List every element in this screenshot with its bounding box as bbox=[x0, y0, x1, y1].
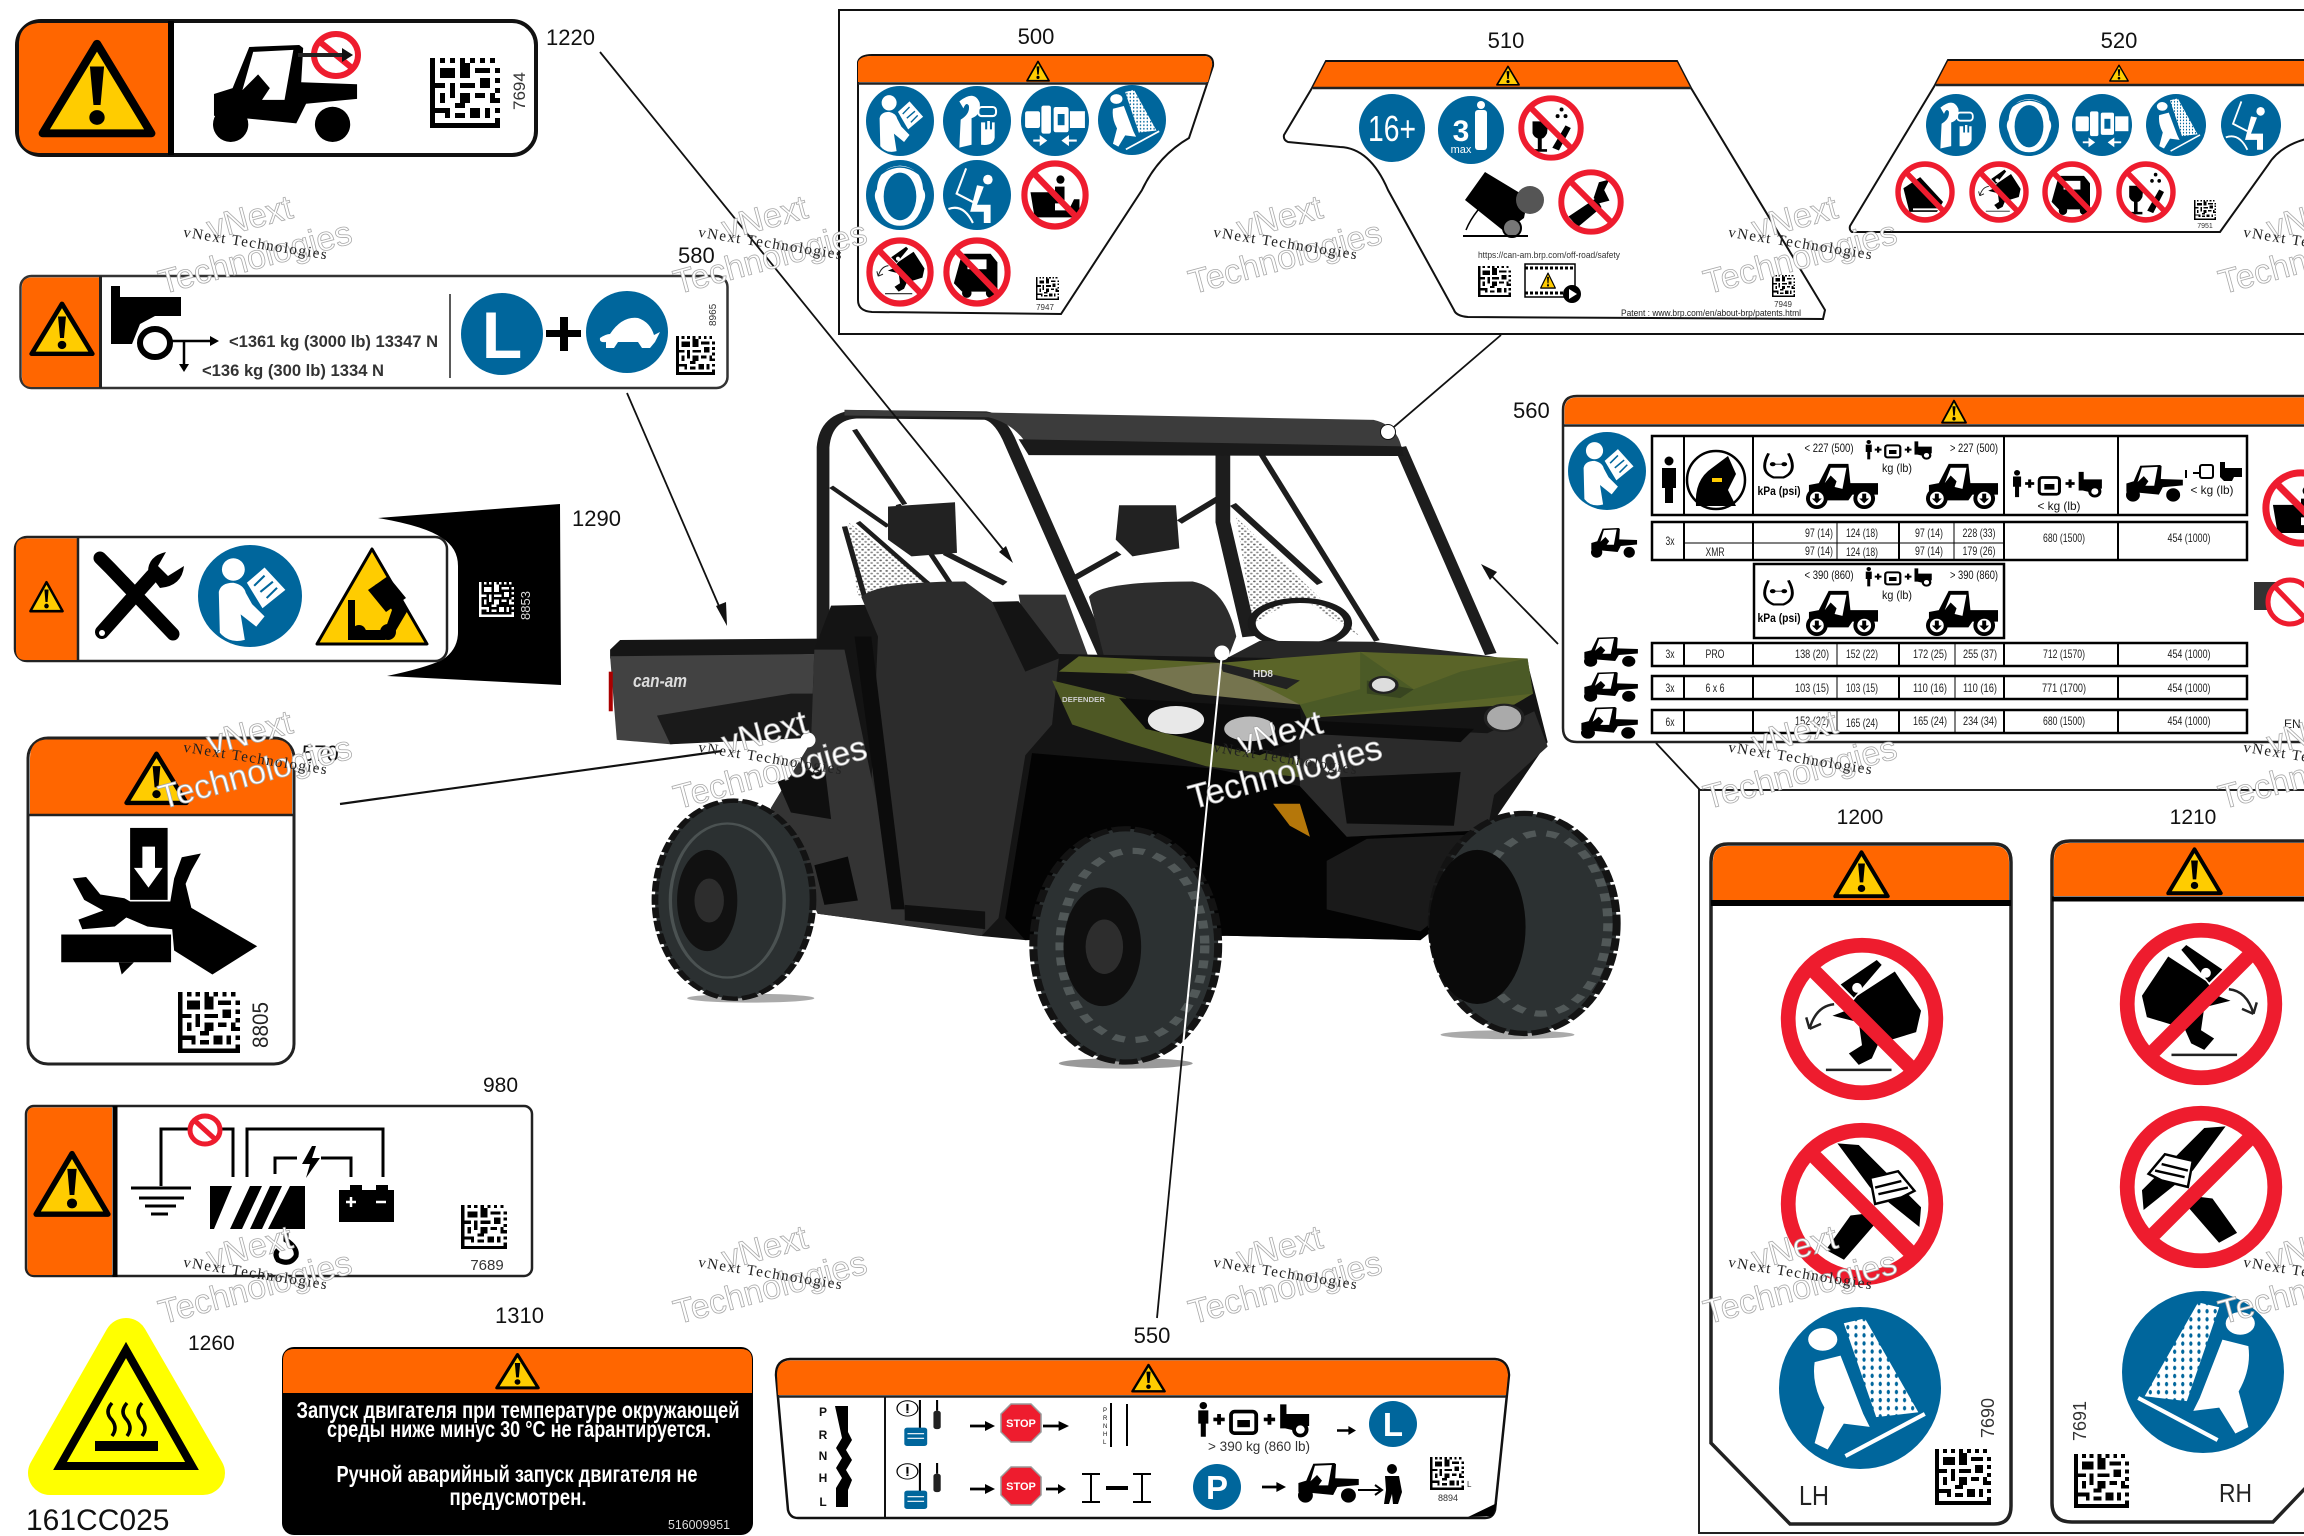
label: 1290: 1290 bbox=[572, 506, 621, 531]
watermark tiles: vNext Technologies bbox=[697, 225, 843, 263]
small gear diagram: R bbox=[1103, 1416, 1108, 1422]
row: PRO: 712 (1570) bbox=[2043, 647, 2085, 661]
row: base and XMR: 97 (14) bbox=[1805, 544, 1833, 558]
icon: tilted vehicle bbox=[1463, 172, 1544, 237]
label: 1260: 1260 bbox=[188, 1332, 235, 1355]
row: 6x6: 6 x 6 bbox=[1706, 681, 1725, 695]
watermark tiles bbox=[154, 188, 2304, 1332]
watermark tiles: vNext Technologies bbox=[1727, 740, 1873, 778]
panel: label 980 bbox=[26, 1106, 532, 1277]
row: 6x: 6x bbox=[1666, 715, 1674, 729]
leader: 560 to 1200 frame bbox=[1656, 743, 1700, 790]
header icons: < kg (lb) bbox=[2190, 483, 2234, 497]
row: PRO: 152 (22) bbox=[1846, 647, 1878, 661]
row 2 sequence: STOP bbox=[1006, 1481, 1036, 1493]
watermark tiles: vNext Technologies bbox=[1212, 225, 1358, 263]
watermark tiles: vNext Technologies bbox=[1727, 1255, 1873, 1293]
watermark tiles: Technologies bbox=[154, 214, 356, 302]
icon: no entry bbox=[298, 34, 358, 76]
panel: label 550 bbox=[776, 1359, 1509, 1518]
panel: label group 500 510 520 frame bbox=[839, 10, 2304, 334]
small gear diagram: P bbox=[1103, 1408, 1107, 1414]
leader: 550 bbox=[1157, 646, 1230, 1318]
second pressure header: kPa (psi) bbox=[1758, 611, 1801, 625]
small gear diagram: N bbox=[1103, 1424, 1107, 1430]
header icons bbox=[1662, 440, 2242, 513]
label: 570: 570 bbox=[302, 741, 339, 766]
second pressure header: < 390 (860) bbox=[1804, 568, 1854, 582]
wind nets bbox=[848, 522, 938, 597]
watermark tiles: Technologies bbox=[1699, 729, 1901, 817]
url text: https://can-am.brp.com/off-road/safety bbox=[1478, 250, 1620, 260]
row: base and XMR: 124 (18) bbox=[1846, 526, 1878, 540]
watermark tiles: Technologies bbox=[154, 729, 356, 817]
watermark tiles: vNext bbox=[1233, 703, 1327, 763]
row: 6x6: 771 (1700) bbox=[2042, 681, 2086, 695]
icon: hook bbox=[276, 1232, 296, 1262]
panel: label 560 bbox=[1563, 396, 2304, 742]
leader: 580 arrow bbox=[627, 393, 727, 626]
watermark tiles: vNext bbox=[718, 188, 812, 248]
panel: label 1290: 8853 bbox=[518, 591, 533, 620]
warning text in russian: среды ниже минус 30 °C не гарантируется. bbox=[327, 1416, 711, 1442]
decal 1200: 7690 bbox=[1978, 1398, 1998, 1438]
icon: video bbox=[1525, 264, 1581, 303]
label: 1220: 1220 bbox=[546, 25, 595, 50]
roof bbox=[844, 410, 1402, 448]
tongue weight text: <136 kg (300 lb) 1334 N bbox=[202, 361, 384, 380]
icon: winch bbox=[210, 1186, 305, 1229]
row: 6x: 454 (1000) bbox=[2168, 714, 2210, 728]
row: base and XMR: 3x bbox=[1666, 534, 1674, 548]
decal 510 bbox=[1284, 61, 1825, 319]
icon: L circle: L bbox=[482, 298, 522, 372]
icon: turtle circle bbox=[586, 291, 668, 373]
second pressure header: kg (lb) bbox=[1882, 588, 1912, 602]
watermark tiles: vNext Technologies bbox=[1212, 740, 1358, 778]
row: base and XMR: 680 (1500) bbox=[2043, 531, 2085, 545]
icon: person exit bbox=[1358, 1464, 1402, 1504]
row: base and XMR: XMR bbox=[1706, 545, 1725, 559]
leader: 570 bbox=[340, 732, 816, 804]
cargo bed bbox=[610, 639, 824, 658]
decal 1210 bbox=[2052, 841, 2304, 1522]
gear selector letters: N bbox=[819, 1449, 827, 1463]
row: 6x6 bbox=[1652, 676, 2247, 699]
leader: 510 to roof bbox=[1388, 335, 1501, 432]
wiring diagram bbox=[131, 1129, 383, 1214]
icon: 16+: 16+ bbox=[1368, 108, 1416, 149]
label: 510: 510 bbox=[1488, 28, 1524, 53]
header icons: < kg (lb) bbox=[2038, 499, 2080, 513]
panel: label 580: 8965 bbox=[708, 303, 719, 326]
panel: label 1220 bbox=[17, 21, 536, 155]
leader: 1220 arrow bbox=[600, 52, 1013, 563]
icon: 3 max bbox=[1438, 96, 1504, 164]
vehicle illustration: HD8 bbox=[1253, 669, 1273, 680]
row: PRO: 138 (20) bbox=[1795, 647, 1829, 661]
row: 6x6: 110 (16) bbox=[1913, 681, 1947, 695]
watermark tiles: vNext bbox=[1748, 703, 1842, 763]
gear selector letters: P bbox=[819, 1405, 827, 1419]
gate bar bbox=[835, 1406, 852, 1507]
small gear diagram: L bbox=[1103, 1440, 1107, 1446]
watermark tiles: vNext bbox=[203, 1218, 297, 1278]
icon: 3 max: 3 bbox=[1453, 115, 1469, 148]
decal 510: Patent : www.brp.com/en/about-brp/patents.html bbox=[1621, 308, 1801, 318]
row: base and XMR: 97 (14) bbox=[1915, 544, 1943, 558]
icon: L circle bbox=[461, 293, 543, 375]
decal 520: 7951 bbox=[2197, 223, 2213, 230]
icon: hot surface warning 1260 bbox=[50, 1340, 203, 1473]
green hood bbox=[1059, 652, 1533, 718]
row: 6x: 165 (24) bbox=[1913, 714, 1947, 728]
leader: 560 arrow bbox=[1481, 564, 1558, 644]
row: PRO bbox=[1652, 643, 2247, 666]
icon: 3 max: max bbox=[1451, 144, 1472, 156]
warning text in russian: Запуск двигателя при температуре окружающей bbox=[296, 1397, 740, 1423]
header icons: kg (lb) bbox=[1882, 461, 1912, 475]
mirrors bbox=[888, 502, 957, 556]
watermark tiles: vNext bbox=[1233, 1218, 1327, 1278]
small gear diagram: H bbox=[1103, 1432, 1107, 1438]
icon: stop bbox=[1001, 1404, 1041, 1442]
dashboard bbox=[1226, 641, 1528, 667]
vehicle illustration bbox=[609, 410, 1617, 1069]
panel: label 580 bbox=[20, 276, 728, 388]
watermark tiles: vNext Technologies bbox=[1727, 225, 1873, 263]
row: 6x: 152 (22) bbox=[1795, 714, 1829, 728]
watermark tiles: Technologies bbox=[669, 1244, 871, 1332]
watermark tiles: vNext bbox=[1233, 188, 1327, 248]
door, seat and side bbox=[861, 581, 1059, 936]
watermark tiles: vNext bbox=[718, 1218, 812, 1278]
table header bbox=[1652, 436, 2247, 515]
vehicle brand text: can-am bbox=[633, 671, 687, 691]
towing capacity text: <1361 kg (3000 lb) 13347 N bbox=[229, 332, 438, 351]
second pressure header: > 390 (860) bbox=[1950, 568, 1998, 582]
watermark tiles: Technologies bbox=[154, 1244, 356, 1332]
row: 6x6: 454 (1000) bbox=[2168, 681, 2210, 695]
black holder shape bbox=[378, 504, 561, 685]
header icons: < 227 (500) bbox=[1804, 441, 1854, 455]
second pressure header bbox=[1754, 564, 2004, 638]
label: 520: 520 bbox=[2101, 28, 2137, 53]
icon: lightning bbox=[302, 1146, 320, 1178]
watermark tiles: vNext bbox=[203, 188, 297, 248]
icon: no connection bbox=[190, 1116, 220, 1144]
row: base and XMR: 179 (26) bbox=[1962, 544, 1996, 558]
watermark tiles: vNext bbox=[1748, 188, 1842, 248]
gear selector letters: H bbox=[819, 1471, 827, 1485]
panel: label 570: 8805 bbox=[248, 1002, 273, 1048]
row: PRO: PRO bbox=[1706, 647, 1724, 661]
icon: hitch trailer bbox=[111, 286, 219, 372]
decal 1210: 7691 bbox=[2070, 1401, 2090, 1441]
watermark tiles: Technologies bbox=[1699, 214, 1901, 302]
watermark tiles: Technologies bbox=[1184, 1244, 1386, 1332]
row 2 sequence: P bbox=[1206, 1469, 1228, 1506]
label: 1200: 1200 bbox=[1837, 806, 1883, 829]
label: 1310: 1310 bbox=[495, 1303, 544, 1328]
row: base and XMR bbox=[1652, 522, 2247, 560]
row: PRO: 3x bbox=[1666, 647, 1674, 661]
watermark tiles: Technologies bbox=[669, 214, 871, 302]
decal 1200 bbox=[1711, 844, 2011, 1524]
watermark tiles: vNext Technologies bbox=[182, 225, 328, 263]
watermark tiles: vNext Technologies bbox=[182, 740, 328, 778]
row 1 sequence: L bbox=[1383, 1406, 1403, 1443]
panel: label 570 bbox=[28, 738, 294, 1064]
watermark tiles: vNext Technologies bbox=[697, 740, 843, 778]
row: base and XMR: 454 (1000) bbox=[2168, 531, 2210, 545]
front chassis bbox=[1005, 753, 1487, 940]
decal 1200: LH bbox=[1799, 1480, 1829, 1511]
row: 6x: 680 (1500) bbox=[2043, 714, 2085, 728]
body base bbox=[771, 601, 1548, 940]
label: 550: 550 bbox=[1134, 1323, 1170, 1348]
warning text in russian: Ручной аварийный запуск двигателя не bbox=[336, 1461, 698, 1487]
panel: label 1220: 7694 bbox=[510, 72, 529, 110]
watermark tiles: vNext bbox=[718, 703, 812, 763]
row 2 sequence bbox=[897, 1457, 1472, 1510]
watermark tiles: vNext bbox=[1748, 1218, 1842, 1278]
headlights bbox=[1148, 706, 1204, 734]
watermark tiles: Technologies bbox=[1184, 214, 1386, 302]
icon: 16+ bbox=[1359, 94, 1425, 162]
nose bbox=[1300, 711, 1548, 837]
gear selector letters bbox=[819, 1405, 828, 1509]
watermark tiles: Technologies bbox=[1184, 729, 1386, 817]
row 2 sequence: L bbox=[1467, 1480, 1472, 1489]
row: 6x: 234 (34) bbox=[1963, 714, 1997, 728]
header icons: > 227 (500) bbox=[1950, 441, 1998, 455]
row: base and XMR: 97 (14) bbox=[1915, 526, 1943, 540]
icon: battery bbox=[339, 1185, 394, 1222]
warning text in russian: предусмотрен. bbox=[450, 1484, 586, 1510]
vehicle illustration: DEFENDER bbox=[1062, 697, 1105, 704]
watermark tiles: vNext bbox=[203, 703, 297, 763]
decal 500 bbox=[858, 55, 1213, 314]
row vehicle icons bbox=[1581, 528, 1638, 739]
row 1 sequence bbox=[897, 1400, 1417, 1454]
row: PRO: 255 (37) bbox=[1963, 647, 1997, 661]
row: 6x: 165 (24) bbox=[1846, 716, 1878, 730]
icon: stop: STOP bbox=[1006, 1418, 1036, 1430]
panel: label 1310: 516009951 bbox=[668, 1517, 730, 1532]
panel: label 1290 bbox=[15, 504, 561, 685]
warning text in russian bbox=[296, 1397, 740, 1510]
decal 1210: RH bbox=[2219, 1478, 2252, 1508]
wheel rear left bbox=[687, 994, 814, 1003]
label: 980: 980 bbox=[483, 1074, 518, 1097]
label: 1210: 1210 bbox=[2170, 806, 2216, 829]
row: 6x6: 103 (15) bbox=[1846, 681, 1878, 695]
panel: label group 1200 1210 frame bbox=[1699, 790, 2304, 1533]
small gear diagram bbox=[1103, 1403, 1127, 1447]
wheel front left bbox=[1059, 1058, 1193, 1069]
row: base and XMR: 97 (14) bbox=[1805, 526, 1833, 540]
label: 500: 500 bbox=[1018, 24, 1054, 49]
watermark tiles: vNext Technologies bbox=[697, 1255, 843, 1293]
right side prohibition icons: EN bbox=[2284, 717, 2301, 731]
icon: hand crush bbox=[61, 828, 257, 974]
decal 520 bbox=[1850, 60, 2304, 232]
decal 500: 7947 bbox=[1036, 303, 1054, 312]
panel: label 1310 bbox=[282, 1347, 753, 1535]
gear selector letters: L bbox=[819, 1495, 827, 1509]
wheel front right bbox=[1441, 1030, 1574, 1039]
icon: plus bbox=[546, 317, 581, 351]
row: base and XMR: 228 (33) bbox=[1962, 526, 1996, 540]
right side prohibition icons bbox=[2254, 471, 2304, 731]
row: base and XMR: 124 (18) bbox=[1846, 545, 1878, 559]
row 1 sequence: > 390 kg (860 lb) bbox=[1208, 1438, 1310, 1454]
row: PRO: 172 (25) bbox=[1913, 647, 1947, 661]
row: 6x6: 3x bbox=[1666, 681, 1674, 695]
seats bbox=[1089, 581, 1236, 663]
decal 510: 7949 bbox=[1774, 300, 1792, 309]
marker: roof dot bbox=[1380, 424, 1396, 440]
panel: label 980: 7689 bbox=[470, 1257, 504, 1274]
label: 580: 580 bbox=[678, 243, 715, 268]
row: PRO: 454 (1000) bbox=[2168, 647, 2210, 661]
watermark tiles: Technologies bbox=[1699, 1244, 1901, 1332]
row: 6x6: 110 (16) bbox=[1963, 681, 1997, 695]
icon: tools bbox=[99, 552, 184, 636]
icon: yellow warning bbox=[317, 549, 427, 644]
header icons: kPa (psi) bbox=[1758, 484, 1801, 498]
headlight housing bbox=[1119, 698, 1303, 755]
gear selector letters: R bbox=[819, 1428, 828, 1442]
watermark tiles: vNext Technologies bbox=[182, 1255, 328, 1293]
cage bars bbox=[823, 414, 1491, 658]
icon: axle swap bbox=[1082, 1474, 1151, 1502]
watermark tiles: Technologies bbox=[669, 729, 871, 817]
label: 560: 560 bbox=[1513, 398, 1550, 423]
watermark tiles: vNext Technologies bbox=[1212, 1255, 1358, 1293]
row: 6x bbox=[1652, 710, 2247, 733]
row 2 sequence: 8894 bbox=[1438, 1493, 1458, 1503]
row: 6x6: 103 (15) bbox=[1795, 681, 1829, 695]
steering wheel bbox=[1252, 600, 1348, 646]
